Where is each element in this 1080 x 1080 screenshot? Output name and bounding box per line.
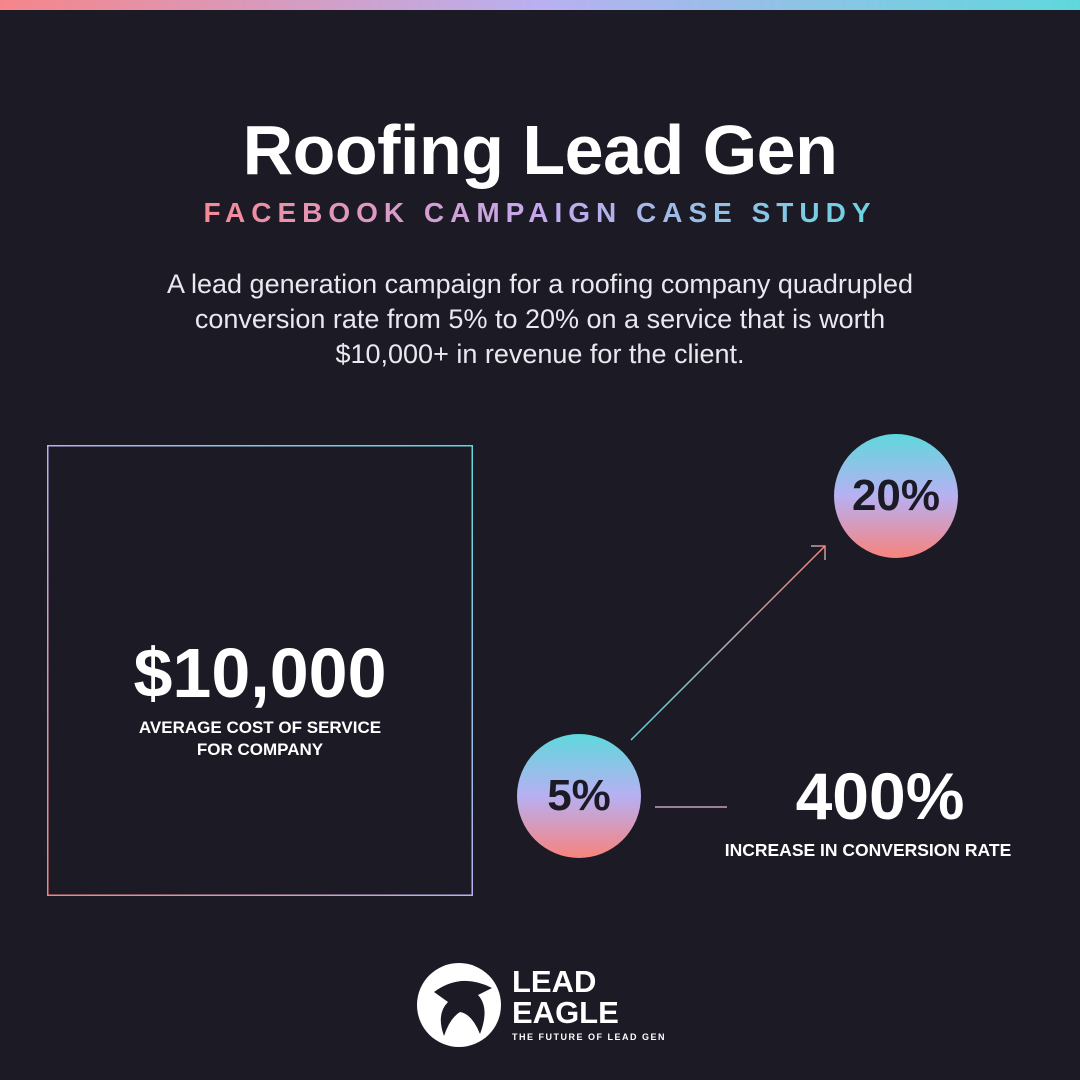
label: average cost: FOR COMPANY [197,740,323,759]
logo text [512,964,619,1030]
description: $10,000+ in revenue for the client. [335,339,745,369]
icon: eagle [417,963,501,1047]
subtitle: FACEBOOK CAMPAIGN CASE STUDY [203,197,877,228]
description: conversion rate from 5% to 20% on a service that is worth [195,304,885,334]
label: increase: INCREASE IN CONVERSION RATE [725,840,1011,860]
description: A lead generation campaign for a roofing company quadrupled [167,269,913,299]
circle: 20%: 20% [852,471,940,520]
logo text: LEAD [512,964,596,999]
description [167,269,913,369]
label: average cost: AVERAGE COST OF SERVICE [139,718,381,737]
logo: THE FUTURE OF LEAD GEN [512,1032,666,1042]
top gradient bar [0,0,1080,10]
label: average cost [139,718,381,759]
circle: 5%: 5% [547,771,611,820]
circle: 5% [517,734,641,858]
stat: 400%: 400% [796,759,964,833]
stat: $10,000: $10,000 [133,634,387,712]
panel: average cost [47,445,473,896]
logo text: EAGLE [512,995,619,1030]
title: Roofing Lead Gen [243,111,837,189]
circle: 20% [834,434,958,558]
logo [417,963,666,1047]
